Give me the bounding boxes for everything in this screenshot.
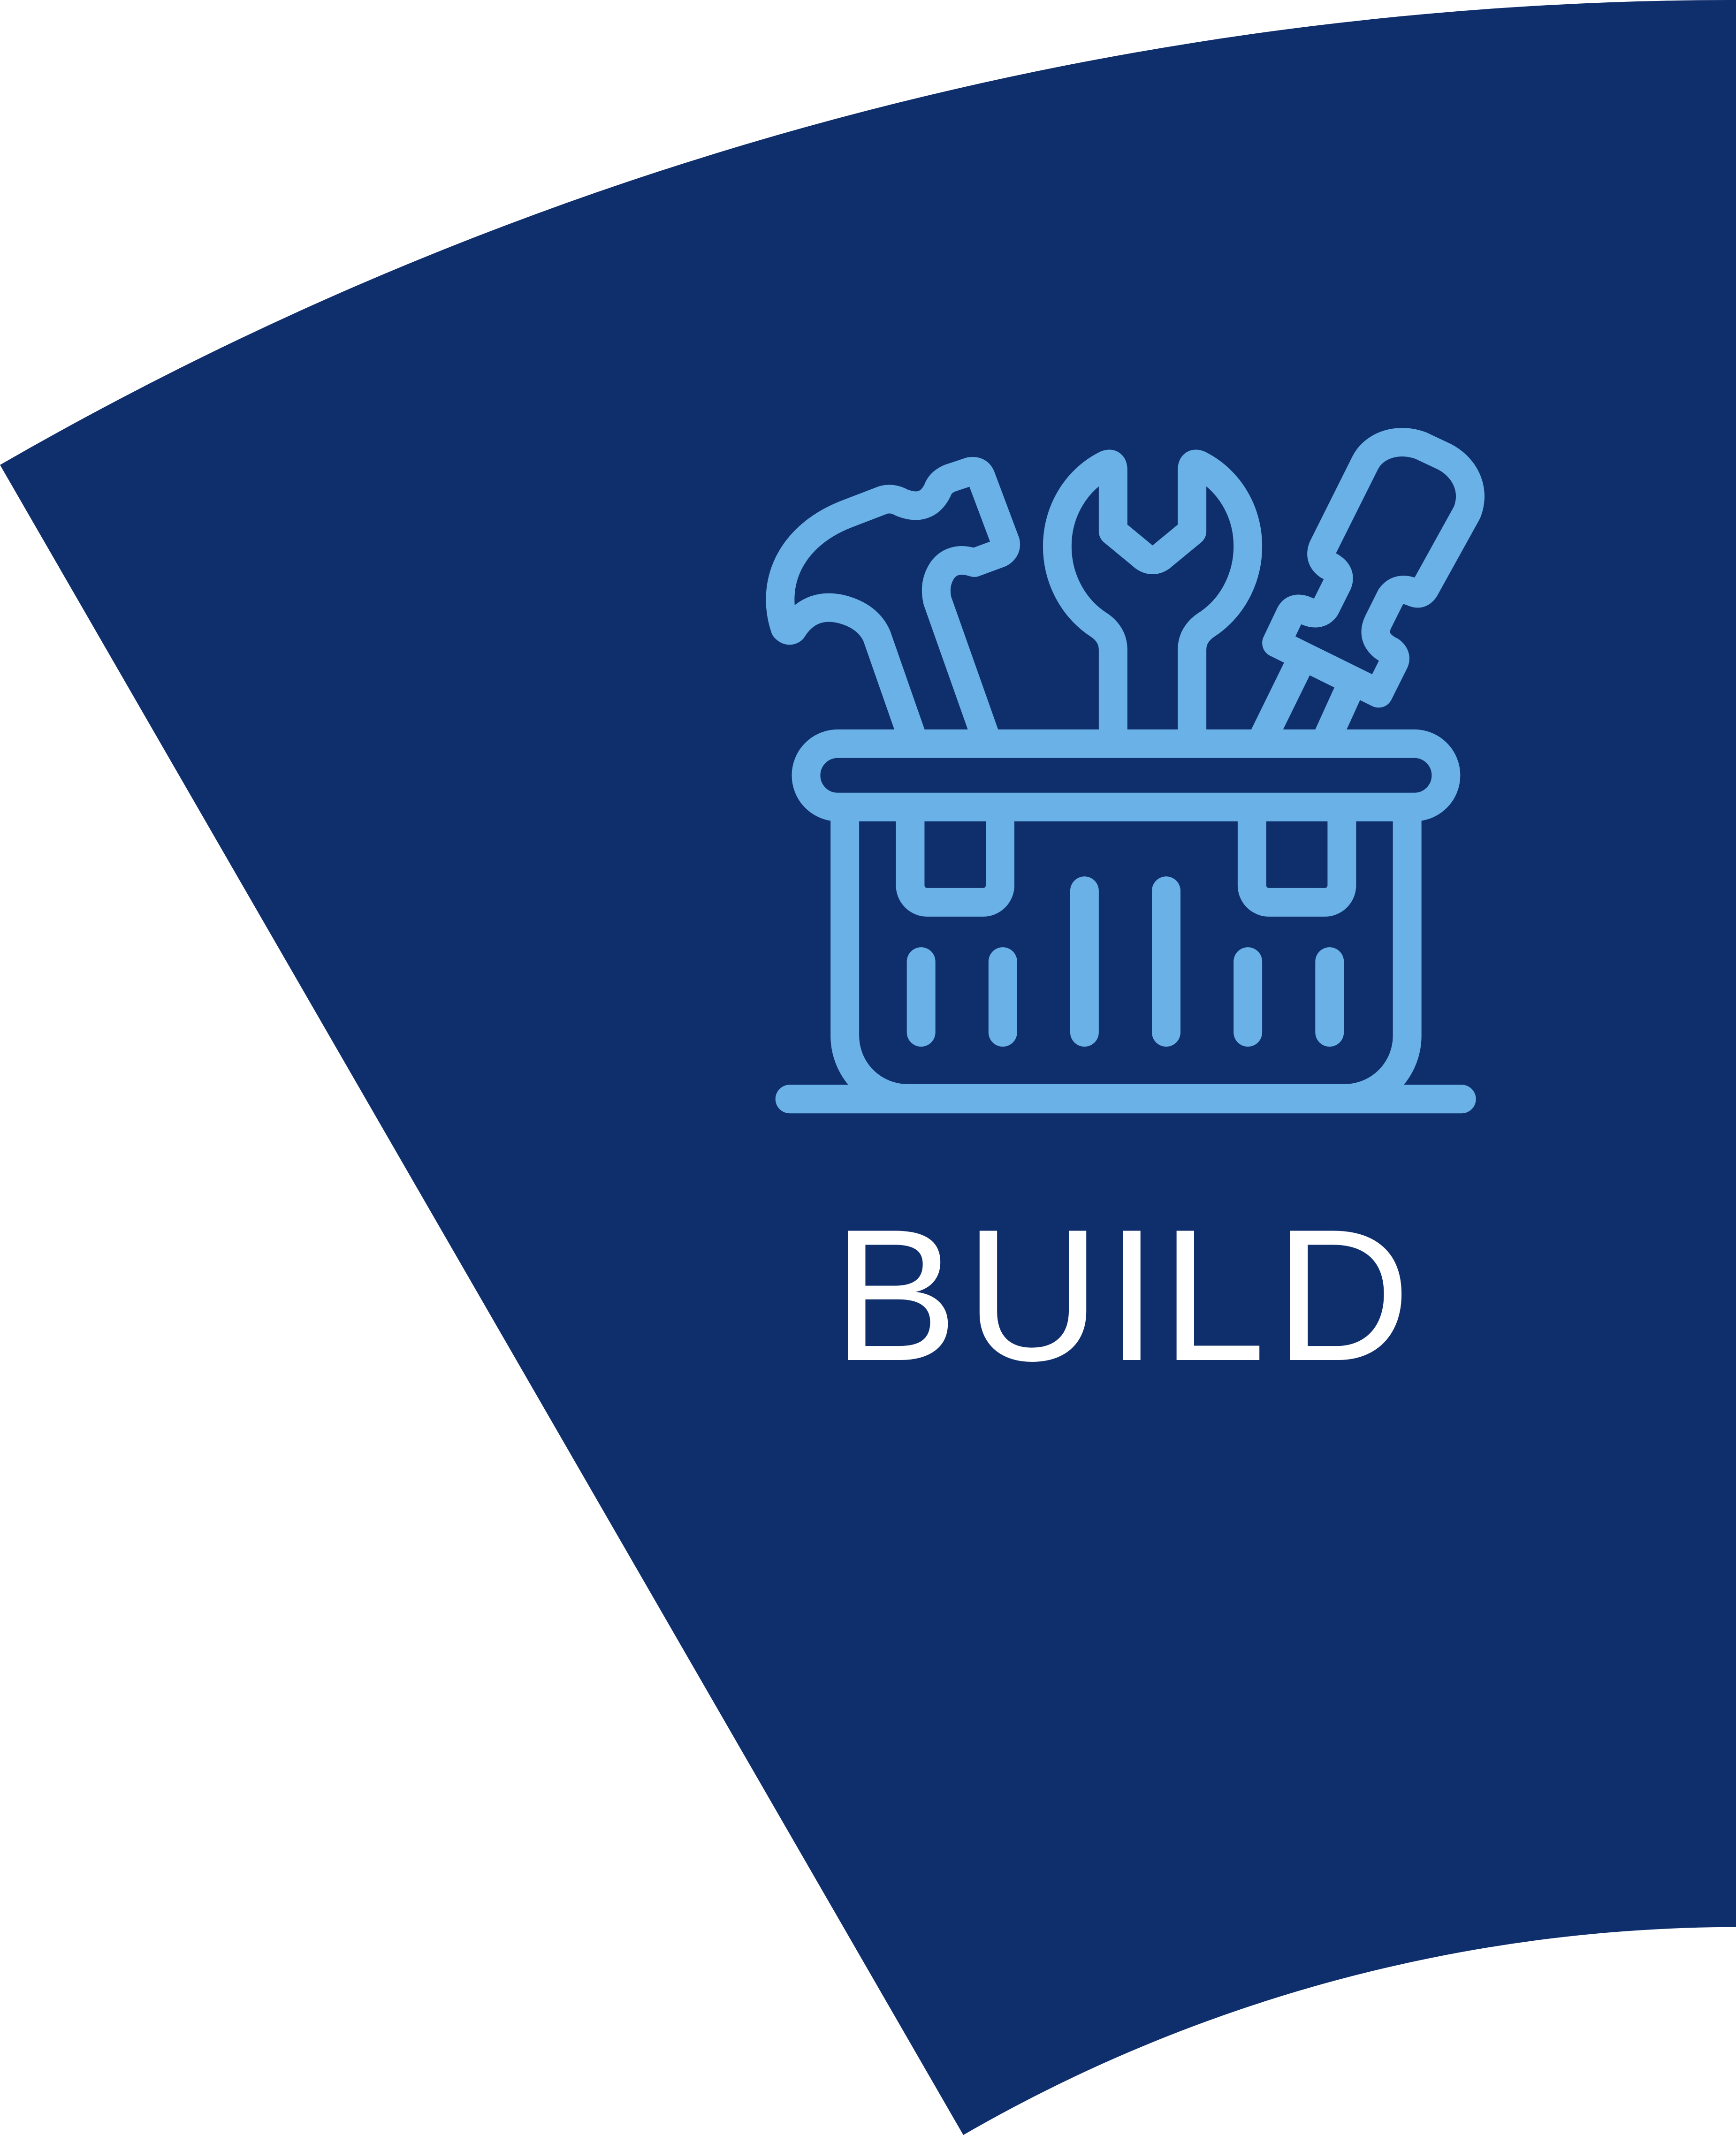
icon: toolbox lid — [806, 744, 1446, 807]
icon: toolbox body — [845, 808, 1407, 1098]
heading: BUILD: BUILD — [832, 1190, 1410, 1400]
icon: toolbox with tools — [780, 442, 1470, 1099]
icon: screwdriver — [1264, 442, 1470, 736]
icon: wrench — [1057, 464, 1248, 742]
icon: hammer — [780, 471, 1006, 736]
icon: toolbox ribs — [921, 891, 1330, 1033]
icon: right latch — [1252, 808, 1342, 902]
icon: left latch — [910, 808, 1000, 902]
icon: ground line — [790, 1094, 1462, 1104]
